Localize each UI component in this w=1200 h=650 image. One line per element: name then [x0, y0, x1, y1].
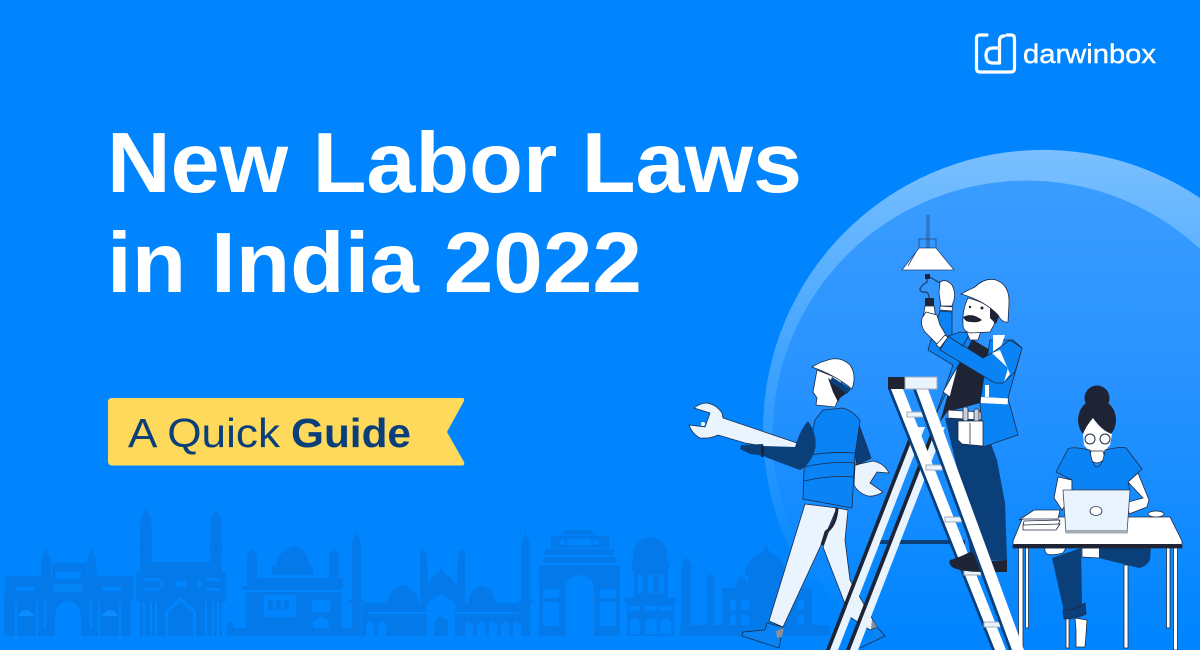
rungs	[907, 412, 1001, 627]
figure: electrician on the ladder	[921, 277, 1022, 572]
moustache	[963, 315, 982, 322]
neck	[1089, 451, 1105, 463]
helmet band	[830, 377, 851, 394]
ladder front section and platform	[888, 377, 1024, 650]
icon: darwinbox mark	[976, 35, 1014, 72]
title	[107, 116, 802, 311]
near arm	[763, 421, 816, 470]
face	[813, 370, 842, 407]
torso	[803, 408, 860, 508]
reflective strips	[981, 335, 1008, 404]
arms	[1054, 477, 1072, 510]
ribbon badge: A Quick Guide	[108, 398, 464, 466]
ribbon badge: A Quick Guide: A Quick	[128, 410, 281, 456]
trousers	[945, 418, 1007, 560]
figure: worker carrying a giant wrench	[689, 359, 889, 648]
monument: Golden Temple	[227, 539, 352, 636]
monument: domed pavilion	[625, 531, 676, 636]
decorative bubble behind the figures	[763, 150, 1200, 650]
hard hat	[961, 279, 1009, 322]
neck	[965, 328, 982, 340]
cuff	[936, 335, 948, 348]
eyes	[980, 306, 984, 310]
skyline silhouette of Indian monuments	[3, 509, 830, 636]
front rail two	[846, 427, 945, 650]
wrench right head	[854, 461, 889, 496]
monument: Charminar	[136, 509, 226, 636]
forearm sleeve	[940, 336, 1022, 383]
back desk legs	[1026, 546, 1170, 648]
jacket collar	[948, 332, 970, 346]
hair	[828, 378, 848, 402]
ribbon badge: A Quick Guide: Guide	[291, 410, 411, 456]
ladder rear section	[826, 389, 1006, 650]
title: in India 2022	[107, 216, 642, 311]
reflective strip on left panel	[943, 366, 958, 397]
wrench	[689, 403, 797, 452]
woman's legs and feet	[1045, 548, 1151, 647]
gloved hand	[740, 444, 765, 456]
title: New Labor Laws	[107, 116, 802, 211]
face	[963, 298, 996, 333]
logo: darwinbox	[976, 35, 1157, 72]
platform	[888, 377, 937, 389]
desk	[1013, 517, 1182, 548]
lower hand holding bulb	[921, 312, 946, 345]
monument: India Gate	[539, 530, 620, 636]
legs	[769, 504, 877, 630]
dark shirt	[940, 338, 990, 422]
shirt	[1056, 447, 1142, 490]
books	[1019, 510, 1060, 530]
logo: darwinbox: darwinbox	[1023, 39, 1157, 69]
hair bun	[1078, 386, 1116, 441]
far arm	[855, 422, 871, 465]
glasses	[1085, 434, 1110, 444]
hard hat	[812, 359, 854, 389]
monument: minaret left	[349, 527, 364, 636]
horizontal brace	[877, 540, 965, 544]
trouser inner seam	[822, 508, 837, 545]
sleeve reflective band	[992, 350, 1010, 382]
shoes	[949, 552, 1007, 572]
front rail one	[826, 427, 925, 650]
face	[1083, 418, 1112, 456]
monument: Gateway of India	[3, 548, 135, 636]
upper hand with screwdriver	[930, 277, 955, 311]
shirt bands	[804, 452, 855, 481]
hanging lamp	[902, 215, 954, 298]
shoes	[742, 619, 885, 648]
hair	[990, 306, 1000, 324]
monument: Jama Masjid	[362, 527, 533, 636]
rear rail inner	[888, 389, 1006, 650]
tool belt and pouches	[948, 407, 983, 446]
laptop	[1063, 490, 1130, 534]
rear rail outer	[913, 389, 1024, 650]
coffee cup	[1148, 511, 1164, 517]
lightbulb	[923, 298, 936, 318]
front desk legs	[1018, 548, 1178, 650]
monument: Taj Mahal	[680, 544, 830, 636]
figure: woman at desk with laptop	[1013, 386, 1182, 650]
left jacket panel and sleeve	[928, 311, 975, 417]
right jacket panel	[980, 340, 1022, 447]
